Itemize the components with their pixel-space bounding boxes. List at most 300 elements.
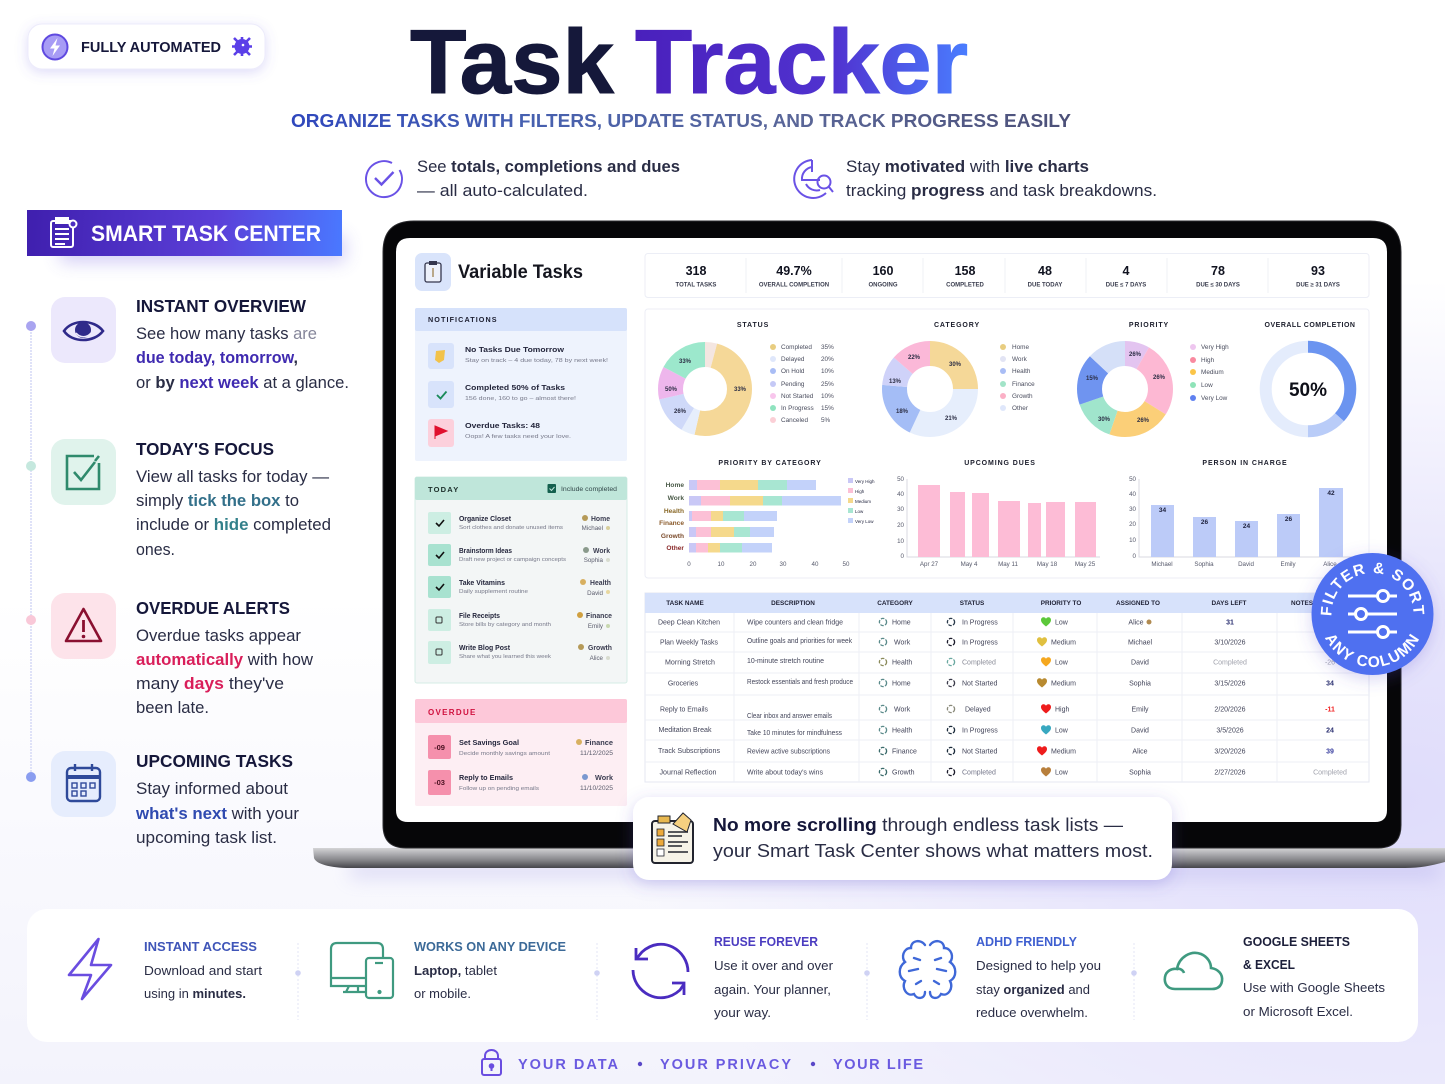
row: groceries: Sophia	[1129, 680, 1151, 688]
row: track subscriptions: Medium	[1051, 748, 1076, 756]
chart: person in charge	[1129, 460, 1360, 568]
task: brainstorm ideas: Work	[593, 548, 610, 555]
row: meditation break: 3/5/2026	[1216, 728, 1244, 734]
benefit: google sheets and excel: or Microsoft Excel.	[1243, 1005, 1353, 1019]
benefit: instant access: INSTANT ACCESS	[144, 940, 257, 954]
benefit: works on any device: or mobile.	[414, 987, 471, 1001]
chart: priority by category: PRIORITY BY CATEGORY	[718, 460, 822, 467]
row: deep clean kitchen: Deep Clean Kitchen	[658, 620, 720, 626]
task: file receipts: File Receipts	[459, 613, 500, 620]
icon: calendar	[51, 751, 116, 817]
chart: category donut: 30%	[949, 362, 962, 368]
row: reply to emails: -11	[1325, 706, 1335, 714]
stacked bar legend	[848, 478, 875, 524]
panel: notifications: NOTIFICATIONS	[428, 315, 498, 324]
task: organize closet: Home	[591, 516, 610, 523]
row: deep clean kitchen: Low	[1055, 620, 1069, 626]
notification: no tasks: No Tasks Due Tomorrow	[465, 347, 565, 354]
row: meditation break: Low	[1055, 728, 1069, 734]
chart: priority by category: 10	[718, 561, 725, 568]
status legend: Canceled	[781, 417, 808, 424]
kpi bar: TOTAL TASKS	[676, 282, 716, 288]
benefit: reuse forever: your way.	[714, 1006, 771, 1020]
row: journal reflection: Completed	[962, 770, 996, 776]
chart: status donut	[665, 322, 834, 424]
icon: lock	[482, 1050, 501, 1075]
task: brainstorm ideas: Sophia	[584, 557, 604, 564]
table header: TASK NAME	[666, 600, 704, 607]
kpi bar: OVERALL COMPLETION	[759, 282, 829, 288]
chart: person in charge: 42	[1327, 490, 1335, 497]
row: morning stretch: Completed	[962, 660, 996, 666]
chart: upcoming dues: 40	[897, 491, 905, 498]
row: morning stretch: Completed	[1213, 660, 1247, 666]
chart: overall completion: 50%	[1289, 380, 1327, 401]
overdue: reply to emails: Follow up on pending emails	[459, 786, 539, 792]
overdue: reply to emails: Reply to Emails	[459, 775, 513, 782]
benefit: google sheets and excel	[1165, 935, 1385, 1019]
table header: STATUS	[960, 600, 985, 607]
task: take vitamins: David	[587, 590, 604, 597]
laptop bezel	[383, 221, 1401, 848]
overdue: reply to emails: -03	[434, 778, 445, 787]
icon: sliders	[1348, 590, 1397, 638]
status legend: 20%	[821, 356, 834, 363]
task: write blog post	[428, 641, 612, 664]
stacked bar legend: Low	[855, 509, 864, 514]
chart: priority donut: 30%	[1098, 417, 1111, 423]
chart: priority by category: Finance	[659, 520, 684, 527]
panel: upcoming tasks: Stay informed about	[136, 780, 288, 798]
row: groceries: Groceries	[668, 680, 699, 688]
icon: refresh arrows	[633, 944, 688, 998]
task: brainstorm ideas	[428, 544, 610, 566]
callout: no more scrolling: No more scrolling through endless task lists —	[713, 814, 1124, 835]
icon: cloud	[1165, 953, 1222, 989]
status legend: 10%	[821, 368, 834, 375]
row: journal reflection: Journal Reflection	[660, 770, 717, 776]
priority legend: Very High	[1201, 344, 1229, 351]
chart: person in charge: 24	[1243, 523, 1250, 530]
row: morning stretch: 10-minute stretch routine	[747, 658, 824, 665]
table header: NOTES	[1291, 600, 1314, 607]
status legend: 25%	[821, 381, 834, 388]
chart: upcoming dues: Apr 27	[920, 561, 939, 568]
category legend: Growth	[1012, 393, 1033, 400]
chart: category donut	[889, 322, 1035, 424]
task: file receipts: Emily	[588, 623, 604, 630]
row: deep clean kitchen: 31	[1226, 620, 1234, 626]
task: take vitamins	[428, 576, 611, 598]
row: plan weekly tasks	[660, 637, 1246, 646]
panel: instant overview: See how many tasks are	[136, 325, 317, 343]
footer: your data your privacy your life: YOUR LIFE	[833, 1057, 925, 1073]
task: take vitamins: Health	[590, 580, 611, 587]
overdue: reply to emails	[428, 770, 614, 795]
feature: live charts: tracking progress and task breakdowns.	[846, 182, 1157, 200]
benefit: google sheets and excel: GOOGLE SHEETS	[1243, 935, 1350, 949]
panel: today: TODAY	[428, 485, 459, 494]
benefit: instant access: Download and start	[144, 964, 263, 978]
benefit: adhd friendly: reduce overwhelm.	[976, 1006, 1088, 1020]
task: write blog post: Growth	[588, 645, 612, 652]
priority legend: High	[1201, 357, 1215, 364]
task: take vitamins: Daily supplement routine	[459, 589, 528, 595]
row: track subscriptions: Review active subscriptions	[747, 748, 830, 756]
chart: person in charge: Emily	[1280, 561, 1296, 568]
panel: overdue alerts: OVERDUE ALERTS	[136, 598, 290, 618]
chart: priority donut: 26%	[1153, 375, 1166, 381]
row: morning stretch	[665, 657, 1335, 666]
kpi bar: 93	[1311, 264, 1325, 278]
panel: overdue	[415, 699, 627, 806]
notification: overdue	[428, 419, 572, 447]
feature: auto-calculated totals: — all auto-calculated.	[417, 182, 588, 200]
chart: upcoming dues: 50	[897, 476, 905, 483]
chart: person in charge: 20	[1129, 521, 1137, 528]
callout: no more scrolling: your Smart Task Center shows what matters most.	[713, 840, 1153, 861]
row: plan weekly tasks: In Progress	[962, 640, 998, 646]
chart: person in charge: 10	[1129, 537, 1137, 544]
row: plan weekly tasks: Medium	[1051, 640, 1076, 646]
status legend: Not Started	[781, 393, 814, 400]
table header: CATEGORY	[877, 600, 913, 607]
chart: priority donut: 26%	[1137, 418, 1150, 424]
benefit: works on any device	[331, 940, 566, 1001]
badge: filter and sort: FILTER & SORT	[1320, 562, 1424, 616]
icon: warning triangle	[51, 593, 116, 659]
chart: upcoming dues: May 11	[998, 561, 1018, 568]
category legend: Finance	[1012, 381, 1035, 388]
table header: DESCRIPTION	[771, 600, 815, 607]
table: tasks	[645, 593, 1369, 782]
overdue: set savings goal: Decide monthly savings amount	[459, 751, 550, 757]
panel: instant overview: due today, tomorrow,	[136, 349, 298, 367]
kpi bar: COMPLETED	[946, 282, 984, 288]
panel: upcoming tasks: UPCOMING TASKS	[136, 751, 293, 771]
notification: overdue: Overdue Tasks: 48	[465, 423, 540, 430]
panel: upcoming tasks: what's next with your	[135, 805, 300, 823]
row: track subscriptions	[658, 746, 1334, 756]
row: plan weekly tasks: Plan Weekly Tasks	[660, 640, 718, 646]
stacked bar legend: Medium	[855, 499, 871, 504]
subtitle: ORGANIZE TASKS WITH FILTERS, UPDATE STATUS, AND TRACK PROGRESS EASILY	[291, 110, 1072, 131]
status legend: Delayed	[781, 356, 805, 363]
panel: instant overview	[51, 296, 349, 392]
title: Tracker	[635, 12, 968, 113]
chart: status donut: 33%	[734, 387, 747, 393]
feature: live charts: Stay motivated with live charts	[846, 158, 1089, 176]
panel: overdue alerts: Overdue tasks appear	[136, 627, 302, 645]
badge: fully automated: FULLY AUTOMATED	[81, 40, 221, 56]
panel: notifications	[415, 308, 627, 461]
badge: fully automated	[28, 24, 265, 69]
chart: person in charge: Michael	[1151, 561, 1173, 568]
row: journal reflection: Write about today's wins	[747, 770, 823, 776]
row: track subscriptions: Not Started	[962, 748, 998, 756]
panel: today's focus: TODAY'S FOCUS	[136, 439, 274, 459]
icon: check circle	[366, 161, 402, 197]
chart: priority by category: Growth	[661, 533, 684, 540]
feature: auto-calculated totals	[366, 158, 680, 200]
row: track subscriptions: Finance	[892, 748, 917, 756]
callout: no more scrolling	[633, 797, 1172, 880]
chart: priority by category: 50	[843, 561, 850, 568]
icon: lightning circle	[42, 34, 68, 60]
row: track subscriptions: 39	[1326, 748, 1334, 756]
chart: overall completion	[1265, 322, 1355, 431]
status legend: In Progress	[781, 405, 814, 412]
benefit: reuse forever	[633, 935, 833, 1020]
notification: overdue: Oops! A few tasks need your love.	[465, 434, 572, 440]
task: write blog post: Write Blog Post	[459, 645, 511, 652]
chart: priority by category: 0	[687, 561, 691, 568]
chart: status donut: 33%	[679, 359, 692, 365]
notification: no tasks	[428, 343, 609, 369]
row: groceries: Not Started	[962, 680, 998, 688]
row: journal reflection: Sophia	[1129, 770, 1151, 776]
status legend: 5%	[821, 417, 831, 424]
row: morning stretch: David	[1131, 660, 1149, 666]
benefit: adhd friendly: Designed to help you	[976, 959, 1101, 973]
footer: your data your privacy your life: YOUR DATA	[518, 1057, 620, 1073]
kpi bar: 49.7%	[776, 264, 812, 278]
chart: person in charge: PERSON IN CHARGE	[1202, 460, 1288, 467]
chart: upcoming dues: 20	[897, 522, 905, 529]
laptop base	[313, 848, 1445, 868]
chart: person in charge: Sophia	[1194, 561, 1214, 568]
row: morning stretch: Health	[892, 660, 912, 666]
row: meditation break: In Progress	[962, 728, 998, 734]
benefit: reuse forever: REUSE FOREVER	[714, 935, 818, 949]
chart: priority by category: 20	[750, 561, 757, 568]
row: groceries: Medium	[1051, 680, 1076, 688]
kpi bar: 160	[873, 264, 893, 278]
icon: devices	[331, 943, 393, 998]
status legend	[770, 344, 834, 424]
icon: chart ring	[794, 160, 833, 198]
banner: smart task center	[27, 210, 345, 262]
stacked bar legend: High	[855, 489, 865, 494]
status legend: Pending	[781, 381, 805, 388]
row: reply to emails: Reply to Emails	[660, 706, 708, 714]
kpi bar: DUE ≥ 31 DAYS	[1296, 282, 1340, 288]
chart: upcoming dues: May 25	[1075, 561, 1096, 568]
chart: upcoming dues: 10	[897, 538, 905, 545]
panel: overdue alerts: automatically with how	[136, 651, 313, 669]
panel: overdue alerts: many days they've	[136, 675, 284, 693]
benefit: works on any device: Laptop, tablet	[414, 964, 498, 978]
task: brainstorm ideas: Brainstorm Ideas	[459, 548, 512, 555]
laptop screen	[396, 238, 1387, 822]
category legend: Other	[1012, 405, 1029, 412]
overdue: set savings goal: Set Savings Goal	[459, 740, 519, 747]
panel: today's focus: ones.	[136, 541, 175, 559]
status legend: 35%	[821, 344, 834, 351]
panel: benefits strip	[27, 909, 1418, 1042]
row: meditation break: 24	[1326, 728, 1334, 734]
chart: person in charge: 30	[1129, 506, 1137, 513]
icon: checkbox	[51, 439, 116, 505]
notification: completed	[428, 381, 577, 408]
footer: your data your privacy your life: YOUR PRIVACY	[660, 1057, 793, 1073]
overdue: reply to emails: Work	[595, 775, 613, 782]
chart: status donut: 26%	[674, 409, 687, 415]
priority legend: Very Low	[1201, 395, 1228, 402]
icon: brain	[900, 941, 955, 998]
priority legend: Medium	[1201, 369, 1224, 376]
row: morning stretch: Morning Stretch	[665, 660, 715, 666]
row: plan weekly tasks: Outline goals and priorities for week	[747, 638, 852, 645]
benefit: reuse forever: again. Your planner,	[714, 983, 831, 997]
category legend: Health	[1012, 368, 1031, 375]
category legend	[1000, 344, 1035, 412]
kpi bar: DUE TODAY	[1028, 282, 1062, 288]
benefit: works on any device: WORKS ON ANY DEVICE	[414, 940, 566, 954]
row: meditation break	[658, 725, 1334, 737]
table header: PRIORITY TO	[1041, 600, 1081, 607]
chart: priority by category: 30	[780, 561, 787, 568]
badge: filter and sort: ANY COLUMN	[1324, 634, 1419, 668]
overdue: set savings goal	[428, 735, 614, 759]
row: journal reflection: Growth	[892, 770, 915, 776]
status legend: 10%	[821, 393, 834, 400]
status legend: 15%	[821, 405, 834, 412]
row: groceries: 34	[1326, 680, 1334, 688]
row: reply to emails: Emily	[1131, 706, 1149, 714]
row: meditation break: Take 10 minutes for mindfulness	[747, 730, 842, 737]
kpi bar: 318	[686, 264, 706, 278]
status legend: On Hold	[781, 368, 805, 375]
task: organize closet	[428, 512, 610, 534]
overdue: set savings goal: 11/12/2025	[580, 750, 614, 757]
overdue: set savings goal: -09	[434, 743, 445, 752]
chart: priority donut: 26%	[1129, 352, 1142, 358]
panel: overdue: OVERDUE	[428, 708, 477, 717]
row: journal reflection: 2/27/2026	[1214, 770, 1246, 776]
row: deep clean kitchen: Alice	[1128, 620, 1144, 626]
icon: lightning	[69, 939, 111, 999]
badge: filter and sort	[1305, 550, 1440, 686]
chart: category donut: 21%	[945, 416, 958, 422]
panel: instant overview: or by next week at a glance.	[136, 374, 349, 392]
benefit: adhd friendly: stay organized and	[976, 983, 1090, 997]
row: reply to emails: Delayed	[965, 706, 991, 714]
kpi bar: 78	[1211, 264, 1225, 278]
feature: auto-calculated totals: See totals, completions and dues	[417, 158, 680, 176]
chart: priority donut: 15%	[1086, 376, 1099, 382]
benefit: adhd friendly: ADHD FRIENDLY	[976, 935, 1078, 949]
chart: upcoming dues: 0	[901, 553, 905, 560]
task: organize closet: Michael	[582, 525, 603, 532]
chart: priority by category: 40	[812, 561, 819, 568]
notification: completed: Completed 50% of Tasks	[465, 385, 565, 392]
chart: person in charge: 34	[1159, 507, 1166, 514]
chart: person in charge: 0	[1133, 553, 1137, 560]
row: reply to emails: High	[1055, 706, 1070, 714]
chart: priority donut	[1086, 322, 1229, 424]
row: journal reflection	[660, 767, 1347, 776]
panel: upcoming tasks	[51, 751, 300, 847]
panel: today's focus: View all tasks for today —	[136, 468, 330, 486]
kpi bar: 158	[955, 264, 975, 278]
banner: smart task center: SMART TASK CENTER	[91, 221, 321, 246]
row: plan weekly tasks: Michael	[1128, 640, 1153, 646]
dashboard header: Variable Tasks	[458, 262, 583, 283]
row: meditation break: David	[1131, 728, 1149, 734]
row: meditation break: Health	[892, 728, 912, 734]
laptop	[313, 221, 1445, 878]
kpi bar: DUE ≤ 7 DAYS	[1106, 282, 1146, 288]
chart: priority by category: Work	[668, 495, 684, 502]
panel: today's focus: simply tick the box to	[136, 492, 299, 510]
row: plan weekly tasks: 3/10/2026	[1214, 640, 1246, 646]
benefit: reuse forever: Use it over and over	[714, 959, 833, 973]
chart: upcoming dues: 30	[897, 506, 905, 513]
task: organize closet: Organize Closet	[459, 516, 512, 523]
stacked bar legend: Very High	[855, 479, 875, 484]
chart: overall completion: OVERALL COMPLETION	[1265, 322, 1355, 329]
overdue: reply to emails: 11/10/2025	[580, 785, 614, 792]
kpi bar: 4	[1123, 264, 1130, 278]
priority legend	[1190, 344, 1229, 402]
chart: person in charge: David	[1238, 561, 1254, 568]
row: deep clean kitchen: Wipe counters and clean fridge	[747, 620, 843, 626]
chart: priority donut: PRIORITY	[1129, 322, 1169, 329]
task: brainstorm ideas: Draft new project or campaign concepts	[459, 557, 566, 563]
priority legend: Low	[1201, 382, 1213, 389]
task: organize closet: Sort clothes and donate unused items	[459, 525, 563, 531]
chart: priority by category: Other	[666, 545, 684, 552]
chart: person in charge: 40	[1129, 491, 1137, 498]
chart: category donut: 22%	[908, 355, 921, 361]
panel: charts	[645, 309, 1369, 578]
row: groceries: 3/15/2026	[1214, 680, 1246, 688]
kpi bar: 48	[1038, 264, 1052, 278]
task: write blog post: Share what you learned this week	[459, 654, 551, 660]
row: reply to emails: Work	[894, 706, 911, 714]
row: deep clean kitchen: In Progress	[962, 620, 998, 626]
panel: upcoming tasks: upcoming task list.	[136, 829, 277, 847]
chart: priority by category: Health	[664, 508, 684, 515]
title: Task	[410, 12, 614, 113]
row: deep clean kitchen	[658, 617, 1234, 626]
row: groceries: Restock essentials and fresh produce	[747, 679, 853, 686]
footer: your data your privacy your life	[482, 1050, 925, 1075]
chart: status donut: STATUS	[737, 322, 769, 329]
dashboard header	[415, 253, 583, 291]
benefit: instant access	[69, 939, 263, 1001]
benefit: instant access: using in minutes.	[144, 987, 246, 1001]
row: journal reflection: Completed	[1313, 770, 1347, 776]
chart: person in charge: Alice	[1323, 561, 1337, 568]
row: plan weekly tasks: Work	[894, 640, 911, 646]
panel: today	[415, 477, 627, 683]
category legend: Work	[1012, 356, 1028, 363]
chart: upcoming dues	[897, 460, 1100, 568]
chart: priority by category	[659, 460, 875, 568]
overdue: set savings goal: Finance	[585, 740, 613, 747]
icon: eye	[51, 297, 116, 363]
kpi bar: ONGOING	[868, 282, 898, 288]
chart: person in charge: 50	[1129, 476, 1137, 483]
task: file receipts	[428, 609, 612, 631]
panel: overdue alerts	[51, 593, 313, 717]
status legend: Completed	[781, 344, 812, 351]
task: write blog post: Alice	[590, 655, 604, 662]
task: file receipts: Finance	[586, 613, 612, 620]
stacked bar legend: Very Low	[855, 519, 874, 524]
